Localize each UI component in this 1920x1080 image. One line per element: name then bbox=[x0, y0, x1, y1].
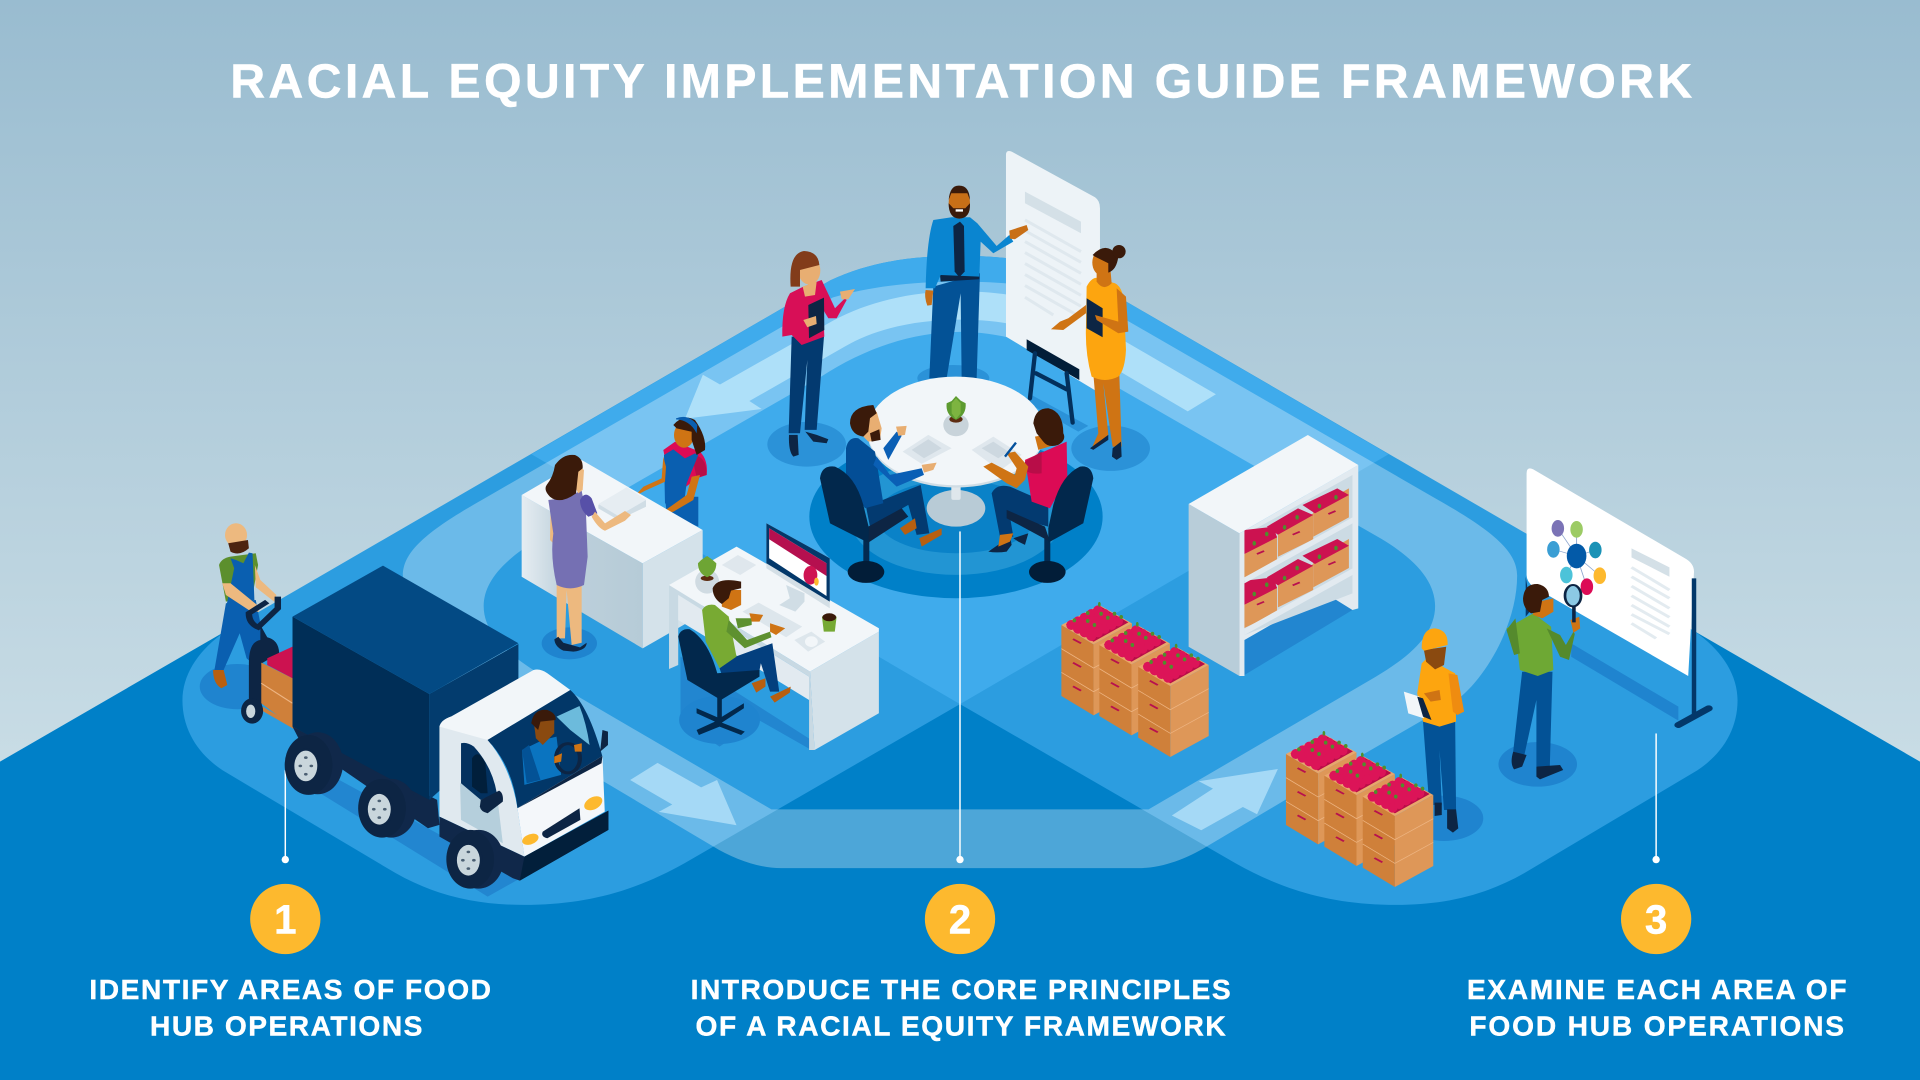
step 3 badge bbox=[1621, 884, 1691, 954]
customer woman in purple dress bbox=[546, 455, 631, 652]
reception desk bbox=[522, 460, 703, 648]
step 3 caption: EXAMINE EACH AREA OF bbox=[1467, 974, 1847, 1005]
chair right bbox=[1007, 466, 1093, 583]
floor rings under table bbox=[809, 435, 1103, 598]
easel bbox=[1027, 339, 1079, 423]
monitor bbox=[766, 523, 830, 612]
table bbox=[868, 377, 1044, 527]
arrow: top curved arrow bbox=[685, 291, 1216, 419]
connector line: step 1 bbox=[282, 770, 289, 863]
worker with overalls bbox=[213, 523, 276, 688]
step 3 caption: FOOD HUB OPERATIONS bbox=[1469, 1010, 1844, 1041]
warehouse group bbox=[1061, 435, 1709, 887]
connector line: step 2 bbox=[956, 531, 964, 863]
rear wheels bbox=[285, 732, 416, 838]
worker shadow bbox=[1405, 796, 1483, 841]
step 1 caption bbox=[89, 974, 491, 1041]
step 2 badge bbox=[925, 884, 995, 954]
desk shadow bbox=[681, 657, 811, 750]
worker in hard hat bbox=[1404, 628, 1464, 833]
step 3 caption bbox=[1467, 974, 1847, 1041]
chair shadow bbox=[679, 696, 760, 744]
seated man at computer bbox=[702, 580, 791, 703]
step 1 caption: HUB OPERATIONS bbox=[150, 1010, 422, 1041]
step 3 badge: 3 bbox=[1645, 897, 1667, 943]
receptionist bbox=[634, 417, 707, 527]
truck cab bbox=[439, 670, 602, 857]
step 2 caption: INTRODUCE THE CORE PRINCIPLES bbox=[691, 974, 1231, 1005]
truck bbox=[285, 566, 608, 889]
inspector with magnifying glass bbox=[1506, 584, 1581, 779]
workstation desk bbox=[669, 547, 879, 750]
seated woman bbox=[983, 408, 1067, 552]
keyboard papers mouse coffee bbox=[722, 555, 837, 652]
office chair bbox=[678, 629, 759, 735]
flipchart bbox=[1006, 151, 1100, 393]
chair left bbox=[820, 466, 908, 583]
workstation group bbox=[200, 523, 879, 897]
process ring band bbox=[403, 282, 1517, 868]
board shadow bbox=[1571, 643, 1678, 721]
floor: dark blue base bbox=[0, 631, 1920, 1080]
front wheel bbox=[446, 830, 504, 889]
customer shadow bbox=[542, 627, 597, 659]
flipchart and meeting group bbox=[767, 151, 1150, 598]
standing man presenter bbox=[925, 186, 1028, 378]
tablets on table bbox=[903, 435, 1022, 471]
presentation board bbox=[1526, 468, 1709, 725]
shelf shadow bbox=[1244, 593, 1352, 675]
standing woman with clipboard, left bbox=[782, 251, 855, 457]
front crates bbox=[1286, 731, 1433, 887]
reception desk group bbox=[522, 417, 707, 659]
storage shelf bbox=[1189, 435, 1358, 676]
hand truck with crate bbox=[241, 597, 300, 731]
floor: central zone bbox=[531, 256, 1389, 704]
truck front bbox=[439, 756, 608, 881]
arrow: bottom left bbox=[630, 763, 737, 825]
shadows of standing people bbox=[767, 365, 1150, 471]
title: RACIAL EQUITY IMPLEMENTATION GUIDE FRAMEWORK bbox=[230, 54, 1692, 108]
truck cargo box bbox=[292, 566, 518, 800]
step 1 caption: IDENTIFY AREAS OF FOOD bbox=[89, 974, 491, 1005]
step 2 caption: OF A RACIAL EQUITY FRAMEWORK bbox=[696, 1010, 1226, 1041]
crates by shelf bbox=[1061, 602, 1209, 757]
connector line: step 3 bbox=[1652, 733, 1660, 863]
truck shadow bbox=[304, 763, 518, 897]
network diagram on board bbox=[1547, 520, 1606, 595]
truck chassis bbox=[292, 727, 439, 828]
standing woman in yellow dress bbox=[1051, 245, 1128, 460]
step 1 badge: 1 bbox=[274, 897, 297, 943]
step 1 badge bbox=[250, 884, 320, 954]
seated man bbox=[846, 405, 942, 547]
step 2 badge: 2 bbox=[949, 897, 971, 943]
desk plant bbox=[695, 556, 719, 594]
inspector shadow bbox=[1498, 742, 1577, 787]
step 2 caption bbox=[691, 974, 1231, 1041]
table plant bbox=[943, 396, 969, 436]
floor: operations zones bbox=[182, 256, 1738, 905]
truck driver bbox=[522, 710, 608, 785]
arrow: bottom right bbox=[1172, 769, 1278, 830]
person with hand truck shadow bbox=[200, 664, 275, 709]
